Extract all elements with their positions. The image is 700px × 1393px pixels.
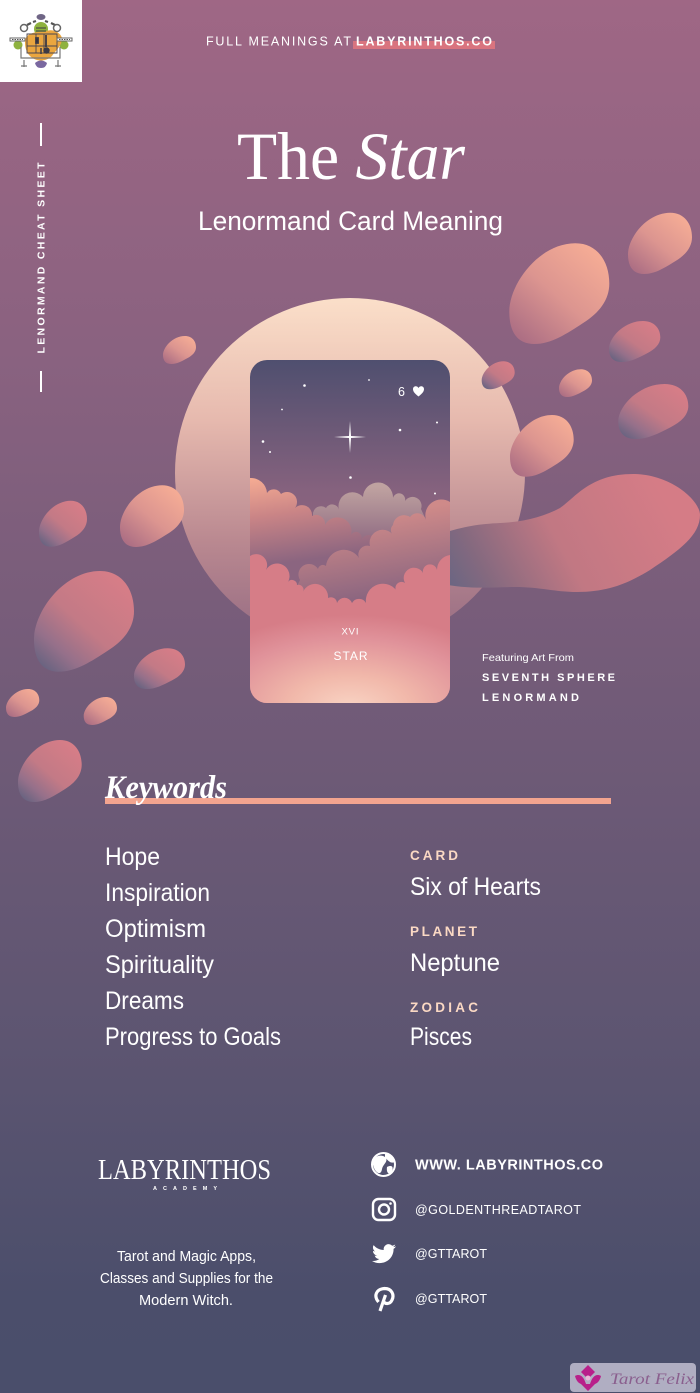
art credit: LENORMAND xyxy=(482,692,579,704)
subtitle: Lenormand Card Meaning xyxy=(198,206,503,236)
link underline highlight xyxy=(353,41,495,49)
header link text: LABYRINTHOS.CO xyxy=(356,34,492,48)
title: The Star xyxy=(237,118,466,194)
planet attribute: PLANET xyxy=(410,924,478,939)
keywords list: Optimism xyxy=(105,915,206,943)
card attribute: CARD xyxy=(410,848,458,863)
moon circle xyxy=(175,298,525,648)
keywords list: Hope xyxy=(105,843,160,871)
art credit: SEVENTH SPHERE xyxy=(482,672,615,684)
card attribute xyxy=(410,848,541,901)
vertical side label: LENORMAND CHEAT SHEET xyxy=(36,162,48,354)
twitter handle: @GTTAROT xyxy=(415,1247,487,1261)
icon: globe xyxy=(372,1153,395,1176)
card glow xyxy=(250,624,450,703)
keywords list xyxy=(105,843,281,1051)
card name: STAR xyxy=(334,649,368,663)
keywords list: Dreams xyxy=(105,987,184,1015)
academy description: Tarot and Magic Apps, xyxy=(117,1249,256,1265)
icon: twitter xyxy=(372,1244,396,1263)
front cloud xyxy=(250,554,450,703)
middle cloud xyxy=(298,500,450,595)
website: WWW. LABYRINTHOS.CO xyxy=(415,1158,603,1174)
keywords list: Progress to Goals xyxy=(105,1023,281,1051)
watermark: Tarot Felix xyxy=(570,1363,696,1392)
zodiac attribute: ZODIAC xyxy=(410,1000,478,1015)
pinterest handle: @GTTAROT xyxy=(415,1292,487,1306)
academy description: Modern Witch. xyxy=(139,1293,233,1309)
academy description xyxy=(100,1249,273,1309)
header link xyxy=(206,34,495,49)
academy description: Classes and Supplies for the xyxy=(100,1271,273,1287)
icon: instagram xyxy=(373,1199,395,1220)
large star xyxy=(334,421,366,453)
art credit xyxy=(482,652,615,704)
header text: FULL MEANINGS AT xyxy=(206,34,351,48)
keywords list: Spirituality xyxy=(105,951,214,979)
planet attribute: Neptune xyxy=(410,949,500,977)
zodiac attribute: Pisces xyxy=(410,1023,472,1051)
card sky xyxy=(250,360,450,520)
stars xyxy=(262,379,438,494)
keywords list: Inspiration xyxy=(105,879,210,907)
academy logo: ACADEMY xyxy=(153,1186,217,1192)
decorative blobs xyxy=(6,213,700,802)
watermark name: Tarot Felix xyxy=(610,1371,694,1388)
logo badge xyxy=(0,0,82,82)
keywords heading: Keywords xyxy=(104,770,227,806)
icon: pinterest xyxy=(376,1288,393,1311)
left cloud xyxy=(250,478,371,556)
tarot card xyxy=(250,360,450,703)
watermark emblem xyxy=(575,1365,601,1391)
card attribute: Six of Hearts xyxy=(410,873,541,901)
card numeral: XVI xyxy=(342,626,358,638)
suit mark xyxy=(398,386,424,396)
suit mark: 6 xyxy=(398,385,405,399)
back cloud xyxy=(313,482,425,538)
academy logo: LABYRINTHOS xyxy=(98,1154,271,1186)
keywords heading xyxy=(104,770,611,806)
instagram handle: @GOLDENTHREADTAROT xyxy=(415,1203,581,1217)
zodiac attribute xyxy=(410,1000,478,1051)
art credit: Featuring Art From xyxy=(482,652,574,664)
planet attribute xyxy=(410,924,500,977)
